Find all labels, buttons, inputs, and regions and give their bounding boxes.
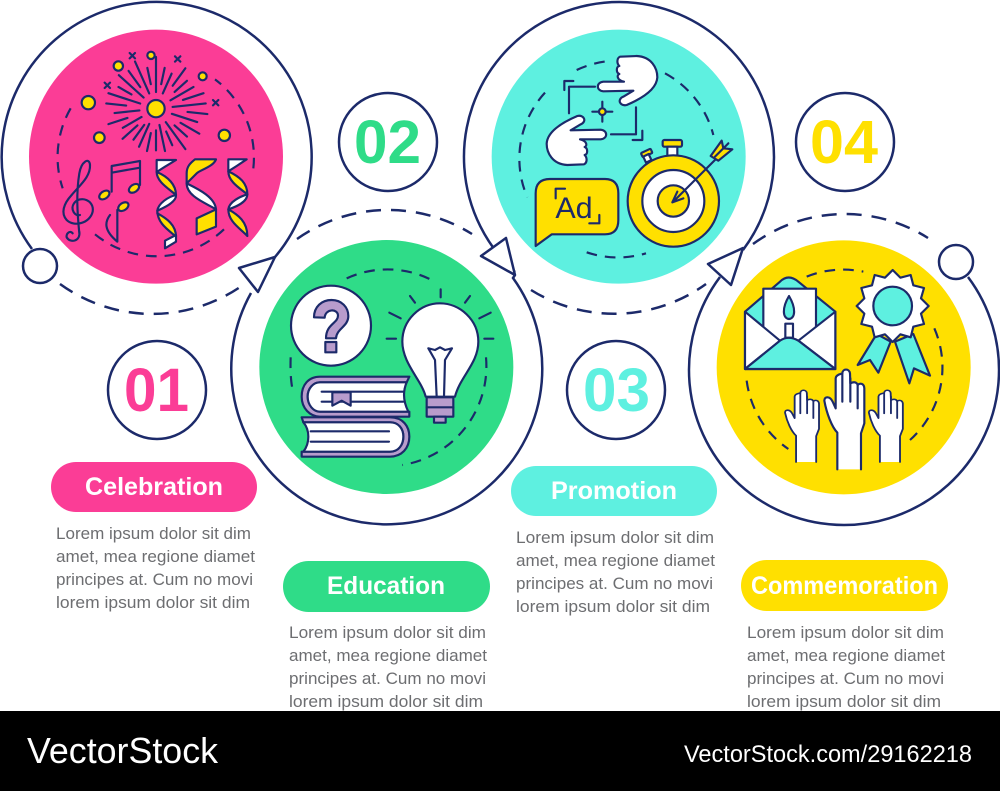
icon: target stopwatch <box>628 140 732 247</box>
icon: fireworks <box>82 52 230 151</box>
text block: Commemoration: Lorem ipsum dolor sit dim <box>747 624 944 642</box>
number badge 01: 01 <box>124 356 189 424</box>
text block: Celebration <box>56 525 255 612</box>
icon: streamer right <box>228 159 247 236</box>
number badge 02 <box>339 93 437 191</box>
text block: Celebration: lorem ipsum dolor sit dim <box>56 594 250 612</box>
number badge 02: 02 <box>354 108 421 176</box>
text block: Promotion: principes at. Cum no movi <box>516 575 713 593</box>
arrow: step 2 to 3 <box>481 238 515 275</box>
heading pill: Commemoration <box>741 560 948 611</box>
heading pill: Celebration <box>51 462 257 512</box>
footer brand: VectorStock <box>27 730 219 771</box>
text block: Commemoration <box>747 624 945 711</box>
text block: Promotion <box>516 529 715 616</box>
text block: Education: Lorem ipsum dolor sit dim <box>289 624 486 642</box>
number badge 04 <box>796 93 894 191</box>
icon: streamer centre <box>187 159 216 234</box>
panel: celebration icon <box>29 30 283 284</box>
heading pill: Celebration: Celebration <box>85 473 223 501</box>
icon: focus frame <box>564 81 642 140</box>
text block: Commemoration: lorem ipsum dolor sit dim <box>747 693 941 711</box>
heading pill: Education: Education <box>327 572 445 600</box>
icon: framing hand top <box>598 56 657 105</box>
text block: Education: amet, mea regione diamet <box>289 647 487 665</box>
heading pill: Commemoration: Commemoration <box>751 572 938 600</box>
ring connector: step 3 <box>464 2 774 314</box>
number badge 04: 04 <box>810 108 878 176</box>
ring connector: step 4 <box>689 214 999 525</box>
icon: raised hands <box>785 370 903 469</box>
icon: ad speech bubble: Ad <box>555 192 593 225</box>
icon: question mark bubble <box>291 286 371 366</box>
text block: Education: lorem ipsum dolor sit dim <box>289 693 483 711</box>
heading pill: Education <box>283 561 490 612</box>
text block: Promotion: lorem ipsum dolor sit dim <box>516 598 710 616</box>
icon: books <box>302 377 409 457</box>
text block: Celebration: amet, mea regione diamet <box>56 548 255 566</box>
icon: streamer left <box>157 160 176 248</box>
text block: Commemoration: amet, mea regione diamet <box>747 647 945 665</box>
text block: Celebration: principes at. Cum no movi <box>56 571 253 589</box>
icon: light bulb <box>387 289 493 423</box>
panel: promotion icon <box>492 30 746 284</box>
heading pill: Promotion <box>511 466 717 516</box>
ring connector: step 2 <box>231 210 542 524</box>
icon: music notes <box>98 161 141 242</box>
icon: ad speech bubble <box>536 179 618 246</box>
text block: Education <box>289 624 487 711</box>
heading pill: Promotion: Promotion <box>551 477 677 505</box>
icon: envelope with candle card <box>745 277 835 369</box>
text block: Commemoration: principes at. Cum no movi <box>747 670 944 688</box>
text block: Celebration: Lorem ipsum dolor sit dim <box>56 525 251 543</box>
text block: Promotion: Lorem ipsum dolor sit dim <box>516 529 714 547</box>
arrow: step 3 to 4 <box>708 248 743 285</box>
number badge 03 <box>567 341 665 439</box>
footer image id: VectorStock.com/29162218 <box>684 741 972 768</box>
number badge 03: 03 <box>583 356 650 424</box>
icon: framing hand bottom <box>547 116 606 165</box>
text block: Education: principes at. Cum no movi <box>289 670 486 688</box>
icon: award rosette <box>857 270 930 383</box>
panel: commemoration icon <box>717 240 971 494</box>
ring connector: step 1 <box>2 2 312 314</box>
icon: treble clef <box>63 161 93 241</box>
footer bar <box>0 711 1000 791</box>
panel: education icon <box>259 240 513 494</box>
text block: Promotion: amet, mea regione diamet <box>516 552 715 570</box>
number badge 01 <box>108 341 206 439</box>
arrow: step 1 to 2 <box>239 257 275 292</box>
